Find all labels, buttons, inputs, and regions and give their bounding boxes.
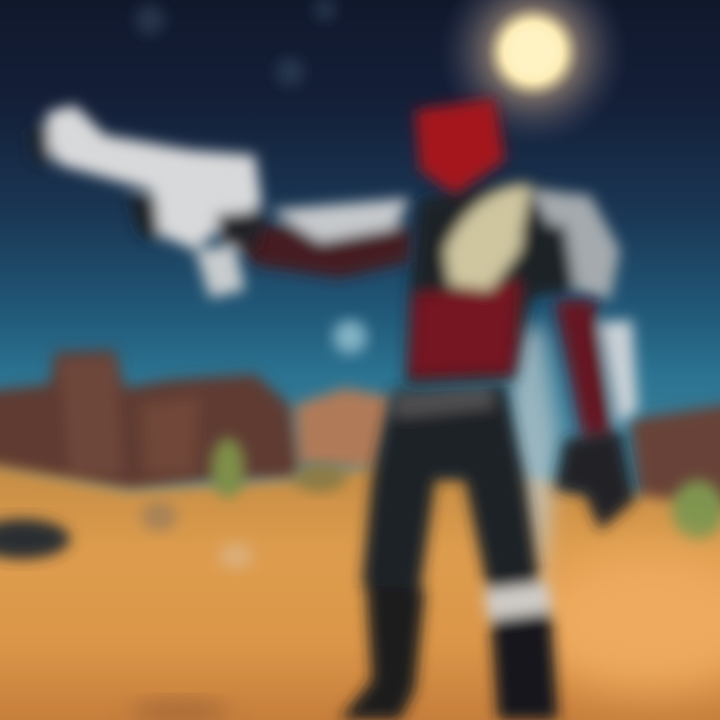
figure: armored character (28, 98, 638, 720)
figure: far arm and hand (555, 300, 638, 530)
background: desert mesas (0, 350, 720, 520)
sky details: stars and sun (135, 0, 628, 354)
figure: extended arm (225, 198, 410, 278)
figure: legs (340, 385, 558, 720)
background: sand ground (0, 462, 720, 720)
background: night sky (0, 0, 720, 520)
figure: light halo (505, 320, 560, 600)
figure: white raised object (28, 105, 265, 298)
ground details: rocks and shrubs (0, 438, 720, 720)
figure: red helmet (415, 98, 505, 195)
figure: torso (405, 180, 620, 385)
